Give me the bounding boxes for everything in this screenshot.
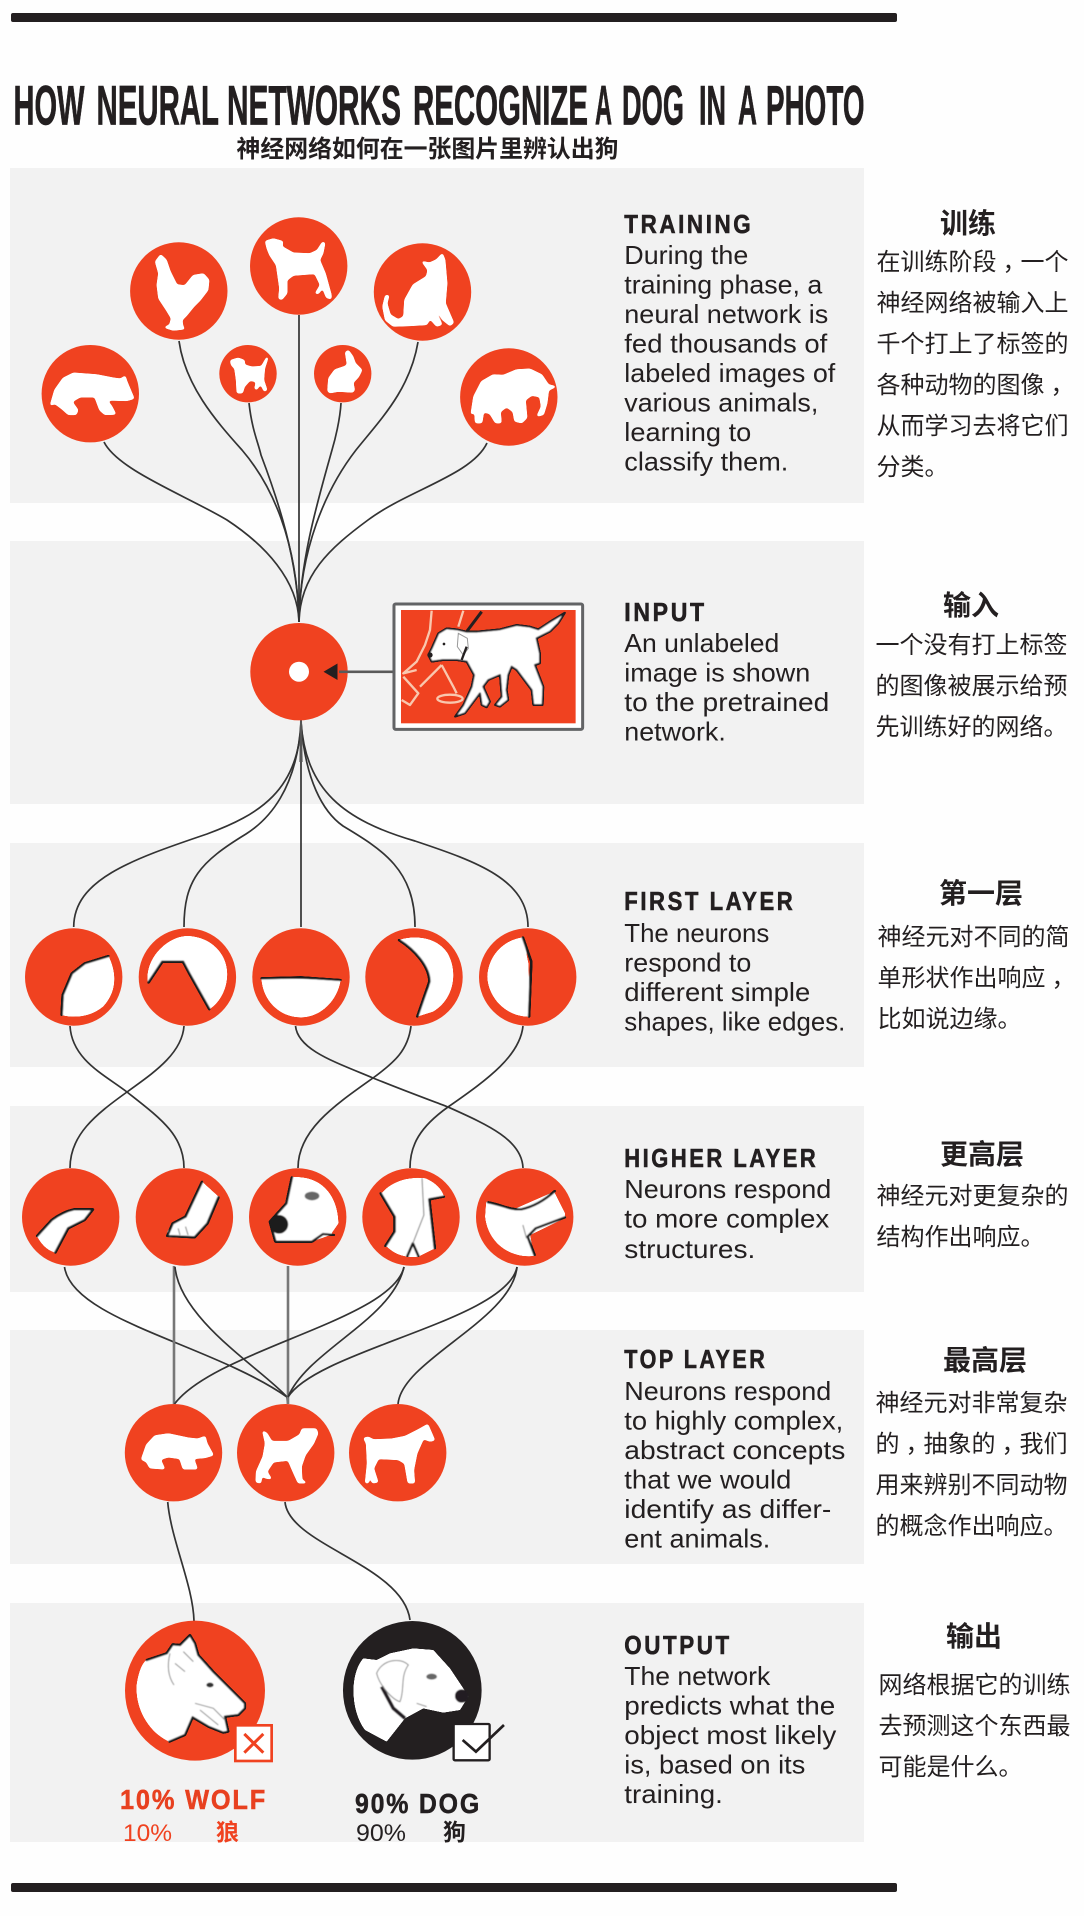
icon: chicken — [156, 255, 209, 330]
text: output: The network — [624, 1661, 771, 1691]
text: output: is, based on its — [624, 1750, 805, 1780]
icon: bear concept — [142, 1434, 213, 1469]
text: training: learning to — [624, 417, 751, 447]
chinese text: output: 输出 — [946, 1621, 1002, 1652]
output label: wolf — [120, 1784, 267, 1847]
chinese text: top layer: 神经元对非常复杂 — [876, 1390, 1068, 1417]
chinese text: first layer: 单形状作出响应， — [878, 965, 1076, 992]
text: top layer: that we would — [624, 1464, 791, 1494]
text: higher layer: structures. — [624, 1234, 755, 1264]
chinese text: input: 一个没有打上标签 — [876, 632, 1068, 659]
text: training — [624, 209, 836, 476]
title: RECOGNIZE — [413, 74, 588, 136]
text: output: predicts what the — [624, 1690, 835, 1720]
chinese text: first layer: 第一层 — [939, 878, 1023, 909]
training neurons left group — [42, 217, 371, 442]
icon: small dog — [231, 357, 268, 393]
text: training: various animals, — [624, 388, 818, 418]
text: first layer: respond to — [624, 948, 751, 978]
icon: crescent edge — [399, 938, 453, 1017]
output label: dog: 狗 — [443, 1819, 466, 1845]
text: training: labeled images of — [624, 358, 836, 388]
arrow from photo to neuron — [324, 664, 395, 680]
text: first layer: different simple — [624, 977, 810, 1007]
text: PHOTO — [766, 74, 864, 136]
chinese text: input: 的图像被展示给预 — [876, 673, 1068, 700]
connectors: input neuron to first layer — [74, 720, 528, 927]
output label: dog: 90% — [356, 1820, 406, 1847]
icon: dog — [266, 239, 331, 299]
panel backgrounds — [10, 168, 864, 1842]
chinese text: output — [878, 1621, 1070, 1781]
chinese text: top layer: 最高层 — [943, 1345, 1027, 1376]
text: output: training. — [624, 1779, 723, 1809]
output label: wolf: 狼 — [216, 1819, 239, 1845]
text: output — [624, 1630, 836, 1809]
chinese text: higher layer — [876, 1139, 1068, 1251]
chinese text: training: 训练 — [940, 208, 996, 239]
text: higher layer: Neurons respond — [624, 1174, 831, 1204]
output label: dog: 90% DOG — [355, 1788, 481, 1819]
chinese text: training: 分类。 — [876, 454, 948, 481]
text: input: INPUT — [624, 597, 707, 627]
title: HOW — [14, 74, 85, 136]
icon: dog head — [354, 1648, 468, 1742]
chinese text: first layer — [878, 878, 1076, 1033]
text: higher layer — [624, 1143, 831, 1264]
icon: horse concept — [364, 1425, 434, 1483]
chinese text: top layer: 用来辨别不同动物 — [876, 1472, 1068, 1499]
text: top layer: ent animals. — [624, 1524, 770, 1554]
chinese text: output: 去预测这个东西最 — [878, 1713, 1070, 1740]
output label: wolf: 10% — [123, 1820, 172, 1847]
text: training: During the — [624, 240, 748, 270]
chinese text: output: 可能是什么。 — [878, 1754, 1022, 1781]
chinese text: training: 从而学习去将它们 — [876, 413, 1068, 440]
text: first layer: FIRST LAYER — [624, 886, 795, 916]
chinese subtitle: 神经网络如何在一张图片里辨认出狗 — [236, 135, 618, 163]
top layer neurons — [125, 1404, 446, 1501]
connectors: first layer to higher layer — [70, 1026, 523, 1168]
chinese text: higher layer: 更高层 — [940, 1139, 1024, 1170]
text: training: TRAINING — [624, 209, 753, 239]
icon: vertical edge — [487, 937, 531, 1017]
title: A — [738, 74, 757, 136]
icon: horizontal edge — [261, 977, 341, 1017]
icon: elephant — [471, 369, 555, 423]
icon: torso fragment — [485, 1191, 565, 1256]
text: higher layer: HIGHER LAYER — [624, 1143, 818, 1173]
text: training: training phase, a — [624, 270, 823, 300]
text: first layer: The neurons — [624, 918, 769, 948]
chinese text: top layer: 的，抽象的，我们 — [876, 1431, 1068, 1458]
connectors: higher layer to top layer — [64, 1266, 517, 1404]
text: training: neural network is — [624, 299, 828, 329]
text: top layer: TOP LAYER — [624, 1344, 767, 1374]
chinese text: training: 各种动物的图像， — [876, 372, 1074, 399]
title: DOG — [622, 74, 684, 136]
chinese text: training: 千个打上了标签的 — [876, 331, 1068, 358]
icon: cat — [383, 254, 453, 326]
connectors: top layer to output — [168, 1502, 410, 1621]
icon: wolf head — [137, 1635, 245, 1742]
icon: boar — [51, 373, 134, 414]
output label: wolf: 10% WOLF — [120, 1784, 267, 1815]
output label: dog — [355, 1788, 481, 1847]
icon: ear fragment — [37, 1209, 94, 1253]
icon: cross box — [235, 1725, 272, 1761]
text: training: fed thousands of — [624, 328, 828, 358]
text: top layer: abstract concepts — [624, 1435, 845, 1465]
title: NEURAL — [96, 74, 219, 136]
text: input: to the pretrained — [624, 687, 829, 717]
text: output: object most likely — [624, 1720, 836, 1750]
first layer neurons — [25, 928, 576, 1026]
icon: dog face fragment — [270, 1177, 338, 1242]
chinese text: training: 神经网络被输入上 — [876, 290, 1068, 317]
higher layer neurons — [22, 1168, 573, 1266]
chinese text: training — [876, 208, 1074, 481]
text: top layer: to highly complex, — [624, 1406, 843, 1436]
icon: paw fragment — [167, 1182, 219, 1237]
top rule — [11, 13, 897, 22]
chinese text: top layer — [876, 1345, 1068, 1540]
chinese text: higher layer: 结构作出响应。 — [876, 1224, 1044, 1251]
bottom rule — [11, 1883, 897, 1892]
chinese text: output: 网络根据它的训练 — [878, 1672, 1070, 1699]
training neurons right group — [374, 243, 558, 446]
text: top layer: Neurons respond — [624, 1376, 831, 1406]
text: input: image is shown — [624, 658, 810, 688]
chinese text: input — [876, 590, 1068, 741]
icon: dog concept — [256, 1429, 318, 1483]
text: top layer — [624, 1344, 845, 1554]
chinese text: first layer: 神经元对不同的简 — [878, 924, 1070, 951]
icon: rabbit — [328, 351, 362, 393]
icon: curved edge — [62, 956, 114, 1017]
icon: legs fragment — [381, 1178, 444, 1257]
text: top layer: identify as differ- — [624, 1494, 831, 1524]
output: wolf result — [125, 1621, 272, 1761]
chinese text: input: 先训练好的网络。 — [876, 714, 1068, 741]
text: first layer: shapes, like edges. — [624, 1006, 845, 1036]
text: output: OUTPUT — [624, 1630, 732, 1660]
text: input: network. — [624, 716, 726, 746]
input photo of dog — [394, 604, 583, 729]
text: higher layer: to more complex — [624, 1204, 829, 1234]
connectors: training images to input neuron — [104, 315, 487, 622]
title: A — [595, 74, 612, 136]
title: IN — [699, 74, 726, 136]
title — [14, 74, 864, 136]
chinese text: higher layer: 神经元对更复杂的 — [876, 1183, 1068, 1210]
input neuron with arrow — [250, 623, 395, 720]
text: input: An unlabeled — [624, 628, 779, 658]
text: training: classify them. — [624, 446, 788, 476]
chinese text: training: 在训练阶段，一个 — [876, 249, 1068, 276]
chinese text: top layer: 的概念作出响应。 — [876, 1513, 1068, 1540]
chinese text: input: 输入 — [943, 590, 999, 621]
text: first layer — [624, 886, 845, 1036]
title: NETWORKS — [227, 74, 401, 136]
icon: check box — [454, 1724, 504, 1760]
output: dog result — [343, 1621, 504, 1760]
icon: peak edge — [148, 936, 227, 1009]
chinese text: first layer: 比如说边缘。 — [878, 1006, 1022, 1033]
text: input — [624, 597, 829, 746]
